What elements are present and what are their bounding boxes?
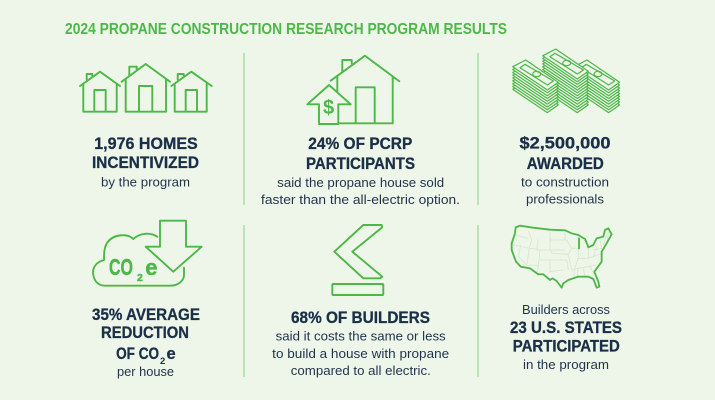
icon: less than or equal sign: [332, 225, 383, 295]
heading: $2,500,000 awarded: AWARDED: [527, 155, 604, 173]
heading: 35% average reduction: [92, 306, 200, 367]
heading: 1,976 homes: [92, 135, 199, 172]
heading: 1,976 homes: INCENTIVIZED: [92, 154, 199, 172]
heading: $2,500,000 awarded: $2,500,000: [520, 134, 610, 152]
heading: 23 U.S. states participated: PARTICIPATED: [513, 338, 620, 356]
text: sold faster: said the propane house sold: [277, 175, 444, 190]
text: builders across: Builders across: [522, 302, 610, 317]
panel: CO2e reduction: [92, 221, 202, 379]
heading: 24% of PCRP participants: PARTICIPANTS: [306, 155, 415, 173]
heading: 35% average reduction: 2: [160, 356, 165, 367]
icon: stacks of money: [513, 49, 620, 113]
text: to construction professionals: to construction: [521, 175, 609, 190]
text: cost comparison: to build a house with propane: [272, 346, 449, 361]
text: cost comparison: [272, 329, 449, 378]
text: in the program: in the program: [523, 357, 609, 372]
text: by the program: by the program: [101, 174, 190, 190]
text: sold faster: faster than the all-electric option.: [261, 192, 460, 207]
icon: cloud with down arrow: 2: [137, 272, 143, 284]
heading: 35% average reduction: 35% AVERAGE: [92, 306, 200, 324]
text: to construction professionals: professionals: [526, 192, 604, 206]
heading: 24% of PCRP participants: 24% OF PCRP: [308, 135, 412, 153]
text: cost comparison: compared to all electric.: [291, 363, 431, 378]
heading: 35% average reduction: OF CO: [116, 345, 159, 363]
panel: cost the same or less: [272, 225, 449, 378]
title: 2024 PROPANE CONSTRUCTION RESEARCH PROGRAM RESULTS: [65, 21, 507, 38]
text: per house: per house: [117, 364, 174, 379]
panel: states participated: [510, 226, 622, 372]
text: sold faster: [261, 175, 460, 207]
icon: cloud with down arrow: e: [145, 255, 158, 280]
icon: cloud with down arrow: CO: [109, 254, 133, 280]
heading: $2,500,000 awarded: [520, 134, 610, 173]
icon: house with price arrow: $: [323, 97, 334, 119]
icon: three houses: [80, 64, 212, 112]
text: to construction professionals: [521, 175, 609, 206]
icon: cloud with down arrow: [93, 221, 202, 286]
panel: homes incentivized: [80, 64, 212, 190]
icon: U.S. map: [512, 226, 612, 288]
heading: 68% of builders: 68% OF BUILDERS: [291, 309, 430, 327]
heading: 35% average reduction: e: [166, 345, 176, 363]
heading: 23 U.S. states participated: [510, 319, 622, 356]
heading: 35% average reduction: REDUCTION: [101, 324, 189, 342]
heading: 23 U.S. states participated: 23 U.S. STATES: [510, 319, 622, 337]
heading: 24% of PCRP participants: [306, 135, 415, 173]
heading: 1,976 homes: 1,976 HOMES: [94, 135, 198, 153]
icon: house with price arrow: [307, 56, 399, 124]
text: cost comparison: said it costs the same or less: [276, 329, 446, 344]
panel: sold faster: [261, 56, 460, 207]
panel: awarded: [513, 49, 620, 206]
